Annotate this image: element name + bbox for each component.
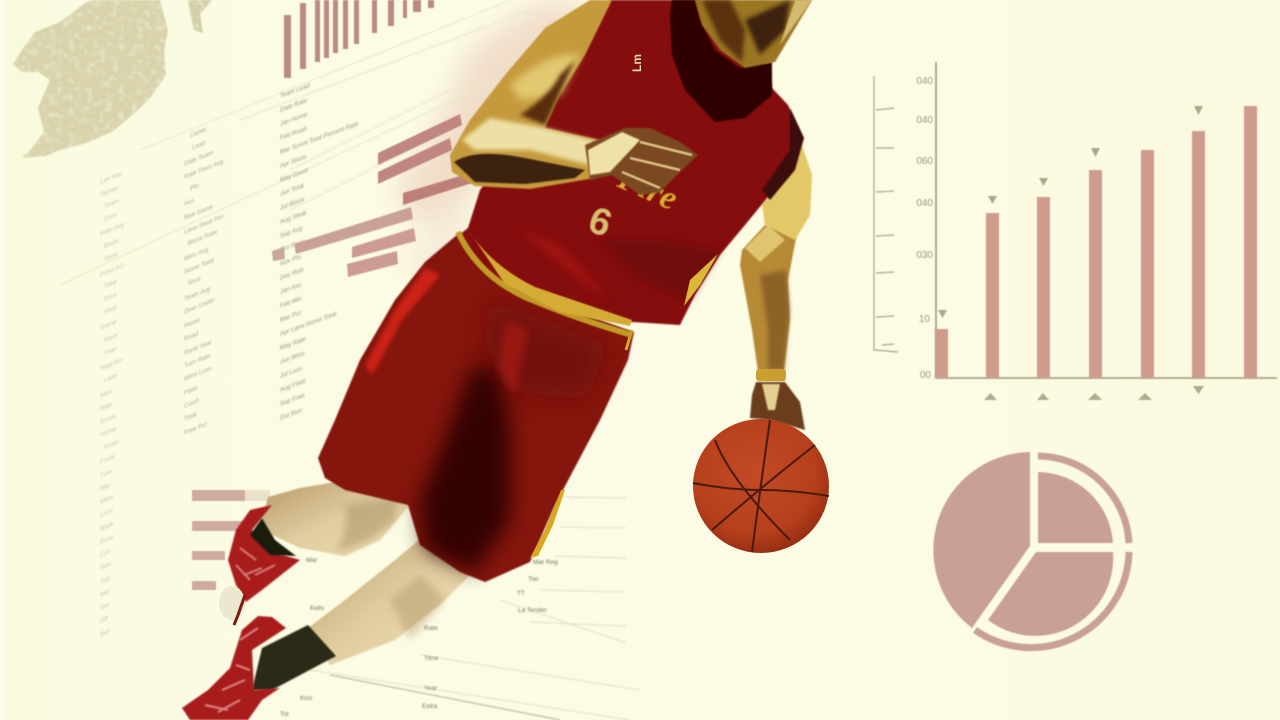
near leg: [182, 535, 470, 720]
y axis labels: 040: [916, 198, 933, 209]
brand tag: Lm: [630, 54, 644, 72]
map texture: [13, 0, 212, 158]
y axis labels: 060: [916, 156, 933, 167]
shading: [600, 240, 720, 300]
hand: [585, 128, 698, 195]
basketball player: [182, 0, 829, 720]
table column 1: Side: [100, 401, 113, 413]
table column 1: Home: [100, 426, 117, 439]
axes: [936, 62, 1277, 378]
lower table: Tot: [280, 711, 289, 718]
table column 2: Carter: [190, 126, 207, 139]
bent arm: [450, 0, 698, 195]
table column 3: Aug Steal: [280, 210, 306, 226]
far leg: [219, 482, 410, 625]
table column 2: Mins Avg: [184, 246, 209, 263]
head and neck: [695, 0, 812, 68]
table column 3: [280, 64, 359, 422]
table column 2: Lead: [192, 139, 206, 152]
pie chart: [933, 452, 1129, 648]
lower table: Time: [424, 655, 439, 662]
armhole dark: [762, 108, 804, 200]
ball: [693, 419, 829, 553]
table column 1: Wins: [100, 494, 113, 506]
hand: [750, 382, 805, 430]
table column 1: Shot: [104, 304, 117, 316]
far shoe: [228, 505, 300, 602]
table column 3: Jul Block: [280, 196, 305, 212]
table column 3: Mar Pct: [280, 310, 301, 324]
table column 1: Set: [100, 601, 109, 612]
table column 1: Point Pct: [100, 262, 124, 279]
table column 2: Lane Steal Pct: [184, 213, 223, 236]
near shoe: [182, 616, 286, 720]
table column 2: Road: [184, 330, 199, 343]
table column 1: Road: [104, 439, 119, 451]
table column 3: Feb Road: [280, 125, 307, 142]
table column 1: Shot: [104, 291, 117, 303]
table column 1: Total: [104, 278, 117, 290]
table column 1: Over: [104, 211, 117, 223]
dribbling arm: [740, 225, 798, 381]
table column 1: Tanner: [100, 185, 118, 199]
lower table: La Tender: [518, 607, 548, 614]
table column 3: Oct Pass: [280, 238, 304, 254]
table column 2: Court: [184, 397, 199, 410]
y axis labels: 00: [920, 370, 931, 381]
top bar strip: [284, 0, 434, 78]
table column 2: [184, 119, 224, 437]
pink motion smear: [395, 0, 590, 290]
y axis labels: 030: [916, 250, 933, 261]
table column 2: Shot: [188, 275, 201, 287]
table column 3: Date Rate: [280, 97, 308, 114]
table column 2: Rank Year: [184, 339, 212, 357]
table column 3: Nov Pts: [280, 254, 301, 268]
table column 1: Lee Mar: [100, 170, 122, 186]
lower table: Year: [424, 685, 438, 692]
table column 1: Net: [100, 588, 110, 599]
table column 2: Team Avg: [184, 285, 211, 303]
table column 1: Steal: [104, 251, 118, 263]
table column 2: Home: [184, 317, 201, 330]
table column 1: Mark: [100, 520, 114, 533]
waistband: [458, 232, 632, 335]
table column 2: Wins Loss: [184, 365, 212, 383]
table column 2: Rate Pass Avg: [184, 158, 224, 181]
table column 3: May Court: [280, 167, 308, 184]
table column 1: Gross: [100, 413, 116, 426]
table column 2: Pts: [190, 182, 199, 192]
lower table: Mar Reg: [533, 559, 558, 566]
table column 3: Apr Lane Home Total: [280, 311, 336, 338]
table column 3: Jun Wins: [280, 350, 305, 366]
table column 1: Rate Avg: [100, 221, 125, 238]
table column 1: [100, 169, 125, 639]
lower table: Kells: [310, 605, 325, 612]
bottom markers: [984, 386, 1204, 400]
table column 1: Game: [100, 318, 117, 332]
table column 2: Score Total: [184, 257, 214, 276]
jersey: [458, 0, 804, 335]
table column 1: Turn: [100, 468, 113, 480]
side piping: [684, 254, 718, 306]
table column 1: Mins: [100, 388, 113, 400]
table column 1: Block: [104, 237, 120, 250]
table column 2: Block Rate: [188, 229, 217, 247]
shadow fold: [420, 365, 510, 572]
lower table: Extra: [422, 703, 438, 710]
y axis labels: [916, 76, 933, 381]
table column 2: Total: [184, 411, 197, 423]
top markers: [938, 106, 1203, 318]
table column 1: Lane: [104, 372, 118, 384]
neck opening: [670, 0, 772, 122]
table column 1: Hits: [100, 482, 110, 493]
lower table: [280, 497, 640, 720]
table column 3: Oct Run: [280, 407, 303, 422]
lower table: TT: [517, 590, 525, 597]
table column 3: Team Lead: [280, 82, 310, 100]
table column 3: Mar Score Total Percent Rate: [280, 120, 359, 156]
bars: [935, 106, 1257, 378]
table column 2: Free Pct: [184, 421, 207, 437]
table column 3: Feb Min: [280, 295, 302, 310]
table column 3: Apr Shots: [280, 154, 306, 170]
table column 1: Fouls: [100, 453, 115, 466]
table column 2: Reb Game: [184, 203, 213, 222]
table column 1: Cut: [100, 548, 110, 559]
table column 1: Team: [104, 198, 119, 210]
forearm shadow: [454, 154, 585, 184]
table column 3: Dec Reb: [280, 266, 304, 282]
jersey number: 6: [583, 199, 617, 246]
bar chart: [874, 62, 1277, 400]
table column 1: Off: [100, 615, 108, 625]
table column 2: Over Under: [184, 297, 215, 316]
table column 3: Aug Field: [280, 378, 306, 394]
table column 3: May Rate: [280, 336, 306, 352]
table column 1: Zone: [100, 533, 114, 546]
forearm highlight: [462, 118, 600, 165]
table column 1: Top: [100, 575, 110, 586]
table column 1: Rank: [104, 332, 119, 344]
lower table: Kiss: [300, 695, 313, 702]
table column 1: Loss: [100, 507, 113, 519]
lower table: Tier: [528, 576, 540, 583]
jersey lettering: Fire: [612, 159, 683, 218]
table column 1: Def: [100, 628, 110, 639]
table column 1: Year: [104, 346, 116, 357]
slanted guide lines: [60, 0, 560, 285]
gantt bars: [272, 114, 472, 277]
table column 3: Jul Loss: [280, 365, 302, 380]
sock: [252, 625, 336, 690]
table column 3: Sep Free: [280, 392, 305, 408]
table column 2: Date Team: [184, 150, 213, 168]
lower table: Rate: [424, 625, 438, 632]
left ruler: [874, 76, 898, 352]
yellow piping: [530, 490, 565, 558]
shoulder: [762, 145, 812, 240]
y axis labels: 040: [916, 76, 933, 87]
table column 3: Sep Avg: [280, 225, 303, 240]
lower table: Mar: [306, 557, 318, 564]
upper shade: [485, 300, 610, 400]
highlight: [365, 268, 440, 375]
shorts: [318, 234, 634, 582]
y axis labels: 10: [919, 314, 930, 325]
table column 3: Jan Ass: [280, 282, 301, 296]
bicep shadow: [520, 60, 575, 125]
y axis labels: 040: [916, 115, 933, 126]
table column 2: Turn Rate: [184, 352, 211, 370]
table column 3: Jan Home: [280, 111, 308, 128]
table column 1: Total Pct: [100, 357, 123, 373]
bicep highlight: [510, 54, 580, 100]
table column 2: Ass: [184, 197, 194, 208]
table column 1: Run: [100, 561, 112, 572]
table column 3: Jun Total: [280, 182, 304, 198]
lower left bars: [192, 490, 270, 590]
table column 2: Field: [184, 385, 198, 397]
